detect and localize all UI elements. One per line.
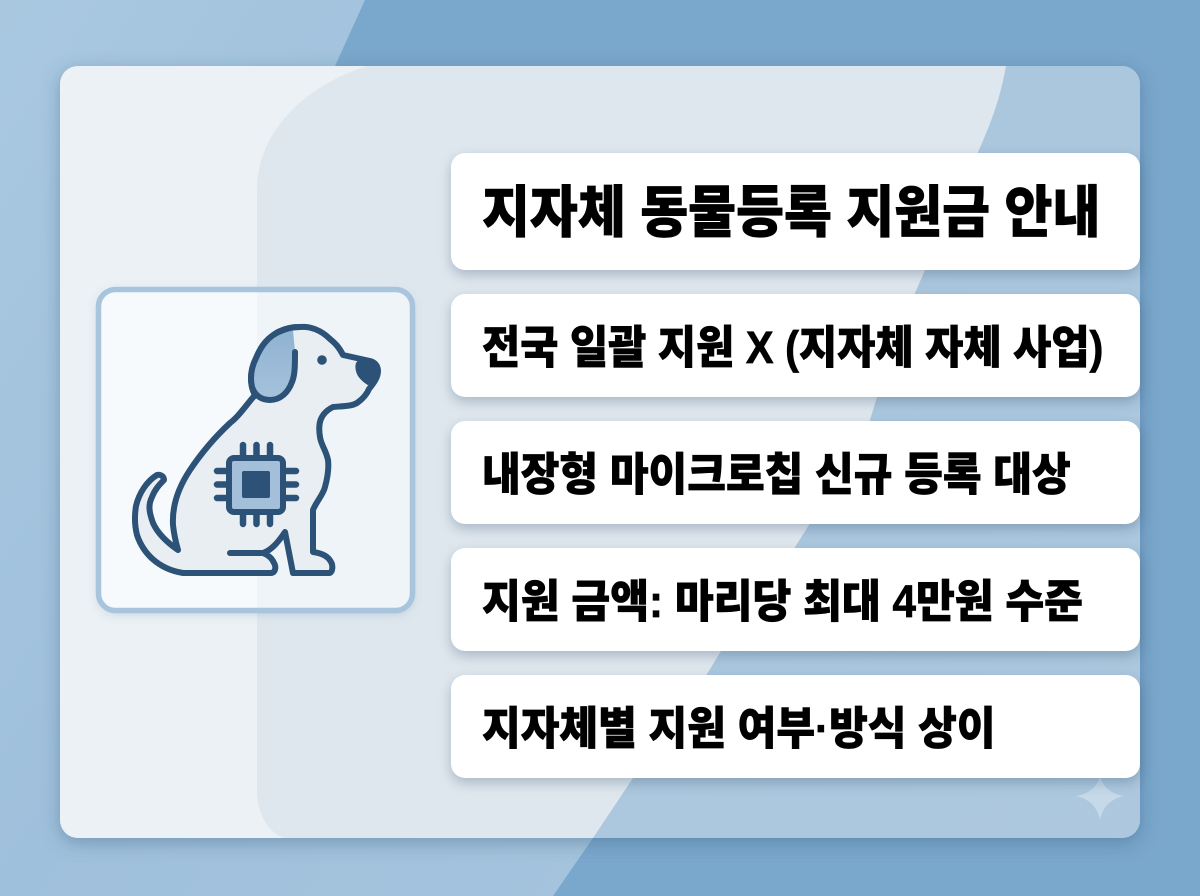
dog head top line: [281, 327, 300, 331]
card: differences: [451, 675, 1140, 778]
dog ear: [251, 329, 295, 400]
icon box frame: [98, 289, 412, 611]
dog body: [135, 327, 378, 573]
card: differences: 지자체별 지원 여부·방식 상이: [482, 703, 996, 754]
card: title: 지자체 동물등록 지원금 안내: [482, 180, 1100, 244]
icon panel: dog with microchip: [94, 286, 418, 618]
panel: left pale area: [60, 66, 367, 838]
dog nose: [356, 361, 378, 384]
card: amount: 지원 금액: 마리당 최대 4만원 수준: [482, 576, 1083, 627]
card: eligibility: [451, 421, 1140, 524]
card: amount: [451, 548, 1140, 651]
dog eye: [317, 355, 327, 365]
card: eligibility: 내장형 마이크로칩 신규 등록 대상: [482, 449, 1071, 500]
icon: dog: [135, 327, 378, 573]
icon: sparkle: [1076, 776, 1124, 820]
icon: microchip: [217, 445, 296, 524]
card: nationwide support: 전국 일괄 지원 X (지자체 자체 사업): [482, 322, 1103, 373]
dog belly line: [230, 550, 263, 556]
card: nationwide support: [451, 294, 1140, 397]
card: title: [451, 153, 1140, 270]
panel: inner rounded shape: [257, 66, 1006, 838]
panel: main glass card: [60, 66, 1140, 838]
